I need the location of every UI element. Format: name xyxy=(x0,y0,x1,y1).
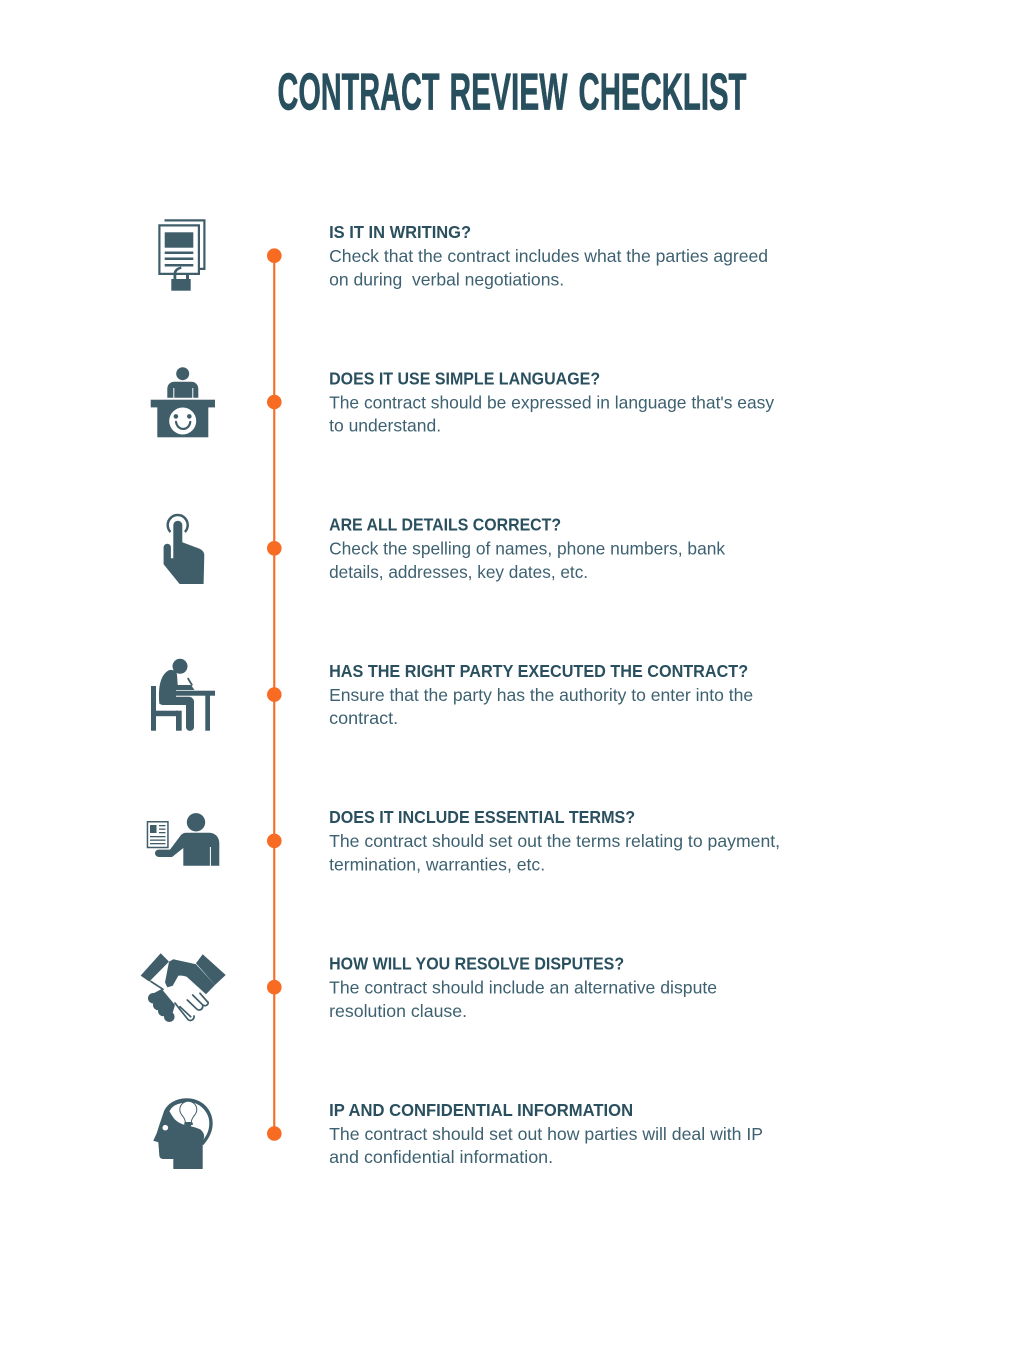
body text: contract. xyxy=(329,708,398,728)
icon: hand tapping xyxy=(164,515,204,584)
body text: to understand. xyxy=(329,416,441,436)
body text xyxy=(329,1124,763,1167)
body text: Check the spelling of names, phone numbers, bank xyxy=(329,539,725,559)
timeline dot xyxy=(267,687,282,702)
body text: The contract should set out how parties will deal with IP xyxy=(329,1124,763,1144)
timeline line xyxy=(273,256,275,1134)
body text: details, addresses, key dates, etc. xyxy=(329,562,588,582)
title: REVIEW xyxy=(450,64,568,122)
body text xyxy=(329,831,780,874)
heading: IP AND CONFIDENTIAL INFORMATION xyxy=(329,1100,633,1120)
timeline dot xyxy=(267,248,282,263)
title xyxy=(278,64,747,122)
timeline dot xyxy=(267,395,282,409)
icon: documents with padlock xyxy=(158,219,206,291)
heading: ARE ALL DETAILS CORRECT? xyxy=(329,515,561,535)
panel: details correct xyxy=(164,515,725,584)
panel: right party xyxy=(151,659,753,731)
panel: is it in writing xyxy=(158,219,768,291)
body text: Ensure that the party has the authority to enter into the xyxy=(329,685,753,705)
timeline dot xyxy=(267,834,282,848)
heading: IS IT IN WRITING? xyxy=(329,222,471,242)
body text: The contract should include an alternative dispute xyxy=(329,978,717,998)
timeline dot xyxy=(267,980,282,994)
heading: DOES IT USE SIMPLE LANGUAGE? xyxy=(329,368,600,388)
body text: resolution clause. xyxy=(329,1001,467,1021)
body text: Check that the contract includes what the parties agreed xyxy=(329,246,768,266)
body text xyxy=(329,246,768,289)
body text: on during verbal negotiations. xyxy=(329,269,564,289)
body text: and confidential information. xyxy=(329,1147,553,1167)
title: CONTRACT xyxy=(278,64,440,122)
body text: termination, warranties, etc. xyxy=(329,854,545,874)
icon: person presenting document xyxy=(147,813,219,866)
icon: head with lightbulb xyxy=(153,1098,213,1169)
panel: IP and confidential information xyxy=(153,1098,763,1169)
body text: The contract should be expressed in language that's easy xyxy=(329,392,774,412)
body text xyxy=(329,978,717,1021)
panel: simple language xyxy=(151,367,774,437)
title: CHECKLIST xyxy=(578,64,747,122)
panel: resolve disputes xyxy=(141,953,717,1022)
icon: person writing at desk xyxy=(151,659,215,731)
heading: HAS THE RIGHT PARTY EXECUTED THE CONTRACT? xyxy=(329,661,748,681)
timeline dot xyxy=(267,1126,282,1141)
heading: HOW WILL YOU RESOLVE DISPUTES? xyxy=(329,954,624,974)
body text xyxy=(329,392,774,436)
heading: DOES IT INCLUDE ESSENTIAL TERMS? xyxy=(329,807,635,827)
icon: handshake xyxy=(141,953,226,1022)
panel: essential terms xyxy=(147,807,780,874)
body text: The contract should set out the terms relating to payment, xyxy=(329,831,780,851)
body text xyxy=(329,685,753,728)
icon: smiling person at desk xyxy=(151,367,215,437)
body text xyxy=(329,539,725,582)
timeline dot xyxy=(267,541,282,556)
